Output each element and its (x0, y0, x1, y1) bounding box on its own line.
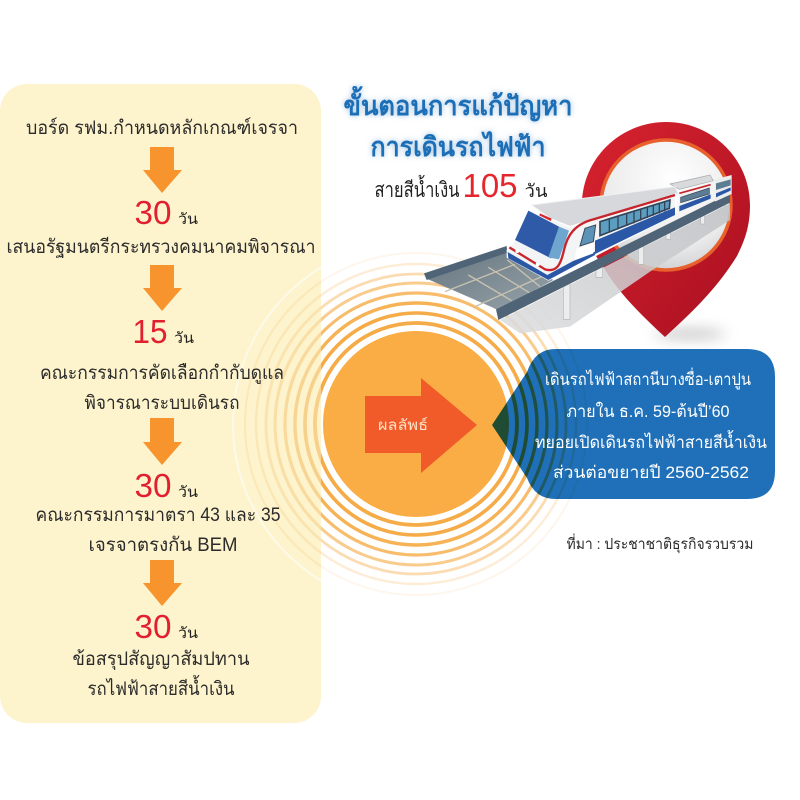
duration 30 days (134, 608, 198, 645)
cab windshield (515, 211, 559, 258)
duration 15 days: 15 (132, 313, 168, 350)
blue lower body panel (595, 207, 675, 254)
icon: location pin (582, 122, 750, 339)
duration 30 days (134, 467, 198, 504)
title: ขั้นตอนการแก้ปัญหา (344, 85, 572, 122)
rails (445, 260, 542, 307)
duration 30 days: วัน (178, 211, 198, 228)
roof (532, 187, 678, 227)
step 4 text: คณะกรรมการมาตรา 43 และ 35 (36, 505, 280, 526)
track far wall (424, 246, 507, 280)
body (507, 194, 676, 280)
panel: process steps background (0, 84, 321, 723)
step 4 text (36, 505, 280, 556)
callout line 1: เดินรถไฟฟ้าสถานีบางซื่อ-เตาปูน (545, 367, 751, 390)
source note: ที่มา : ประชาชาติธุรกิจรวบรวม (566, 533, 754, 554)
callout line 4: ส่วนต่อขยายปี 2560-2562 (553, 463, 749, 482)
windows (600, 200, 670, 236)
viaduct underside (500, 203, 730, 333)
panel: result callout (492, 349, 775, 499)
title: ขั้นตอนการแก้ปัญหา (344, 85, 572, 122)
duration 30 days: 30 (134, 467, 172, 504)
step 3 text: คณะกรรมการคัดเลือกกำกับดูแล (40, 363, 284, 384)
arrow: step 1 to 2 (143, 147, 182, 193)
duration 30 days: วัน (178, 484, 198, 501)
track near wall (496, 193, 730, 320)
title: การเดินรถไฟฟ้า (370, 131, 546, 162)
step 3 text: พิจารณาระบบเดินรถ (84, 393, 240, 414)
blue lower front (508, 252, 595, 280)
step 3 text (40, 363, 284, 414)
duration 30 days: วัน (178, 625, 198, 642)
arrow: step 2 to 3 (143, 265, 182, 311)
elevated viaduct and train scene (424, 175, 732, 333)
subtitle: blue line 105 days (374, 167, 548, 204)
arrow: step 4 to 5 (143, 560, 182, 606)
roof marker (539, 213, 552, 221)
duration 15 days (132, 313, 194, 350)
duration 30 days (134, 194, 198, 231)
step 5 text: รถไฟฟ้าสายสีน้ำเงิน (88, 675, 235, 700)
rear carriage 2 (679, 183, 712, 212)
duration 15 days: วัน (174, 330, 194, 347)
step 5 text: ข้อสรุปสัญญาสัมปทาน (72, 649, 250, 671)
subtitle: blue line 105 days: สายสีน้ำเงิน (374, 175, 460, 202)
arrow: step 3 to 4 (143, 418, 182, 465)
duration 30 days: 30 (134, 608, 172, 645)
title: การเดินรถไฟฟ้า (370, 131, 546, 162)
step 1 text: บอร์ด รฟม.กำหนดหลักเกณฑ์เจรจา (26, 117, 298, 139)
door window (580, 225, 596, 246)
arrow: result (365, 378, 477, 473)
callout line 3: ทยอยเปิดเดินรถไฟฟ้าสายสีน้ำเงิน (535, 430, 767, 452)
headlights (515, 249, 519, 253)
title (344, 85, 572, 162)
rear carriage 3 (715, 175, 732, 202)
orange circle (323, 331, 509, 517)
subtitle: blue line 105 days: วัน (524, 181, 548, 201)
door (574, 243, 594, 261)
step 5 text (72, 649, 250, 700)
track bed (426, 250, 553, 310)
step 2 text: เสนอรัฐมนตรีกระทรวงคมนาคมพิจารณา (6, 236, 316, 258)
concentric orange rings (233, 241, 599, 607)
callout line 2: ภายใน ธ.ค. 59-ต้นปี’60 (566, 401, 730, 421)
arrow label: ผลลัพธ์ (378, 417, 428, 434)
step 4 text: เจรจาตรงกัน BEM (88, 535, 238, 556)
red stripe (509, 195, 675, 270)
duration 30 days: 30 (134, 194, 172, 231)
pillars (563, 201, 725, 319)
subtitle: blue line 105 days: 105 (462, 167, 518, 204)
